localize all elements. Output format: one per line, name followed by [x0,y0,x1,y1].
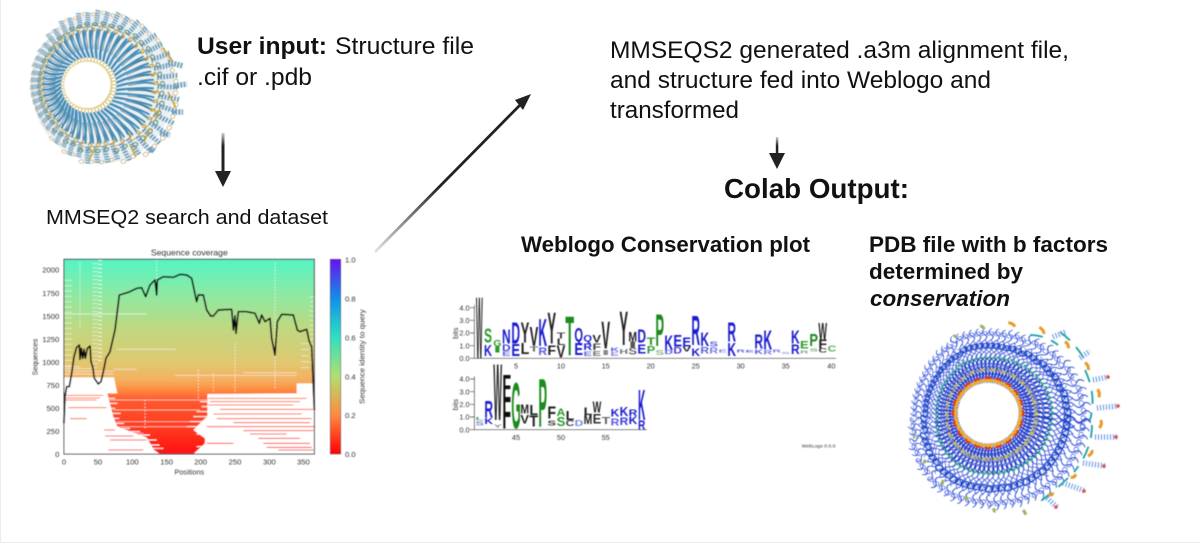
label: MMSEQ2 search and dataset: MMSEQ2 search and dataset [46,207,328,229]
colorbar labels: 0.6 [345,333,356,342]
y axis labels: 750 [47,381,59,390]
y axis labels: 250 [47,427,59,436]
colored stripes in sparse regions [64,395,315,450]
logo row 2: W [593,400,602,417]
logo row 2: S [475,420,485,427]
logo axis labels: 2.0 [459,400,470,409]
logo row 2: M [584,413,592,427]
y axis title: Sequences [30,338,39,375]
logo row 1: E [583,351,593,358]
logo row 2: W [493,348,502,438]
logo row 1: Y [619,302,628,356]
text: MMSEQS2 alignment description: transformed [610,97,739,124]
x axis title: Positions [174,467,205,476]
colorbar title: Sequence identity to query [358,309,367,404]
logo axis labels: 1.0 [459,341,470,350]
logo row 1: G [493,338,501,348]
logo row 2: L [584,406,592,418]
heading: user input: Structure file [335,33,474,60]
logo row 1: C [828,345,837,354]
logo row 1: L [521,341,529,358]
x axis labels: 50 [94,458,102,467]
logo row 1: R [763,350,772,357]
logo row 2: R [620,416,628,428]
coverage heatmap [63,259,315,454]
logo row 1: V [557,341,566,361]
logo row 1: D [637,326,646,347]
logo row 2: E [593,410,601,426]
colorbar labels: 1.0 [345,256,356,265]
logo row 1: K [727,339,736,360]
logo row 2: G [511,368,521,442]
heading: Weblogo Conservation plot: Weblogo Conservation plot [521,232,811,257]
logo row 1: K [484,343,492,360]
heading: user input: .cif or .pdb [197,64,312,91]
logo row 1: I [493,345,501,355]
logo row 1: K [763,324,772,355]
logo row 1: R [709,345,719,355]
logo row 1: R [791,341,800,357]
arrow: search to alignment [375,94,531,252]
logo row 1: I [628,340,637,349]
logo axis labels: 0.0 [459,425,470,434]
x axis labels: 250 [229,458,241,467]
y axis labels [42,266,59,459]
logo axis labels: bits [451,399,460,410]
logo axis labels: 50 [557,433,565,442]
logo axis labels: 1.0 [459,413,470,422]
chart title: Sequence coverage [151,247,228,257]
logo row 1: V [592,334,602,346]
logo axis labels: 25 [692,362,700,371]
logo row 1: S [809,347,818,352]
x axis labels: 300 [263,458,276,467]
logo row 2: L [566,408,574,423]
x axis labels [62,458,310,467]
logo row 1: E [682,335,691,350]
logo axis labels: 40 [827,362,835,371]
logo row 1: Y [521,318,529,350]
heading: PDB file with b factors [869,232,1108,311]
illustration: input protein ring structure [19,1,190,175]
colorbar labels: 0.4 [345,372,356,381]
logo row 1: S [781,351,791,355]
logo row 2: C [566,419,575,428]
logo row 1: W [476,278,483,377]
logo row 2: M [520,401,529,416]
frayed edges of the red zone [107,398,208,448]
logo row 1: E [800,339,809,351]
chart: weblogo conservation plot [451,278,837,449]
x axis labels: 200 [194,458,207,467]
logo row 2: R [611,417,619,428]
logo row 1: P [647,344,656,356]
logo row 1: R [691,307,700,354]
logo row 1: E [502,351,512,358]
logo axis labels: 2.0 [459,329,470,338]
chart: weblogo conservation plot: K [638,382,645,430]
logo row 2 [475,348,645,442]
logo row 1: R [583,342,592,352]
logo row 1: K [791,326,800,347]
logo row 1: H [619,347,628,356]
logo row 1: R [727,317,736,348]
logo row 1: S [484,325,492,348]
y axis labels: 1250 [42,335,59,344]
arrow: alignment to colab output [769,137,785,169]
x axis labels: 0 [62,458,66,467]
logo axes [470,305,836,430]
logo row 1: V [682,345,691,354]
logo row 1: K [691,347,701,359]
logo row 1: F [818,337,827,351]
logo row 1: E [637,342,646,357]
logo row 1: K [664,330,673,355]
logo row 2: K [620,405,629,419]
logo row 1: R [800,349,810,354]
logo row 2: D [575,418,583,428]
logo row 1: V [530,321,539,352]
heading: PDB file with b factors: determined by [869,259,1024,284]
logo axis labels: 4.0 [459,303,470,312]
logo row 2: R [629,408,638,418]
y axis labels: 1000 [42,358,59,367]
logo row 2: K [611,408,620,420]
logo row 2: L [475,416,484,421]
logo row 2: F [547,402,556,422]
logo row 1: E [745,349,755,354]
y axis labels: 1750 [42,289,59,298]
x axis labels: 100 [126,458,139,467]
logo axis labels: 10 [557,362,565,371]
logo axis labels: 4.0 [459,375,470,384]
logo row 2: F [502,387,511,438]
logo row 1: Q [574,326,583,347]
heading: Colab Output: Colab Output: [724,173,909,204]
text: MMSEQS2 alignment description: and structure fed into Weblogo and [610,67,991,94]
logo row 2: S [547,418,556,427]
logo row 1: S [655,348,664,357]
logo row 1: E [511,340,520,360]
logo axis labels [451,303,836,449]
logo row 1: E [673,332,682,351]
logo row 2: V [520,412,529,426]
logo row 1: D [502,343,511,353]
logo row 1: K [538,312,547,355]
logo axis labels: 15 [602,362,610,371]
logo row 1: Q [583,334,592,344]
y axis labels: 2000 [42,266,59,275]
logo row 1: C [818,349,828,355]
logo row 1: P [809,330,818,350]
logo row 2: P [538,366,547,442]
logo row 2: R [638,418,645,432]
logo row 1: R [754,331,763,353]
logo row 1: L [557,337,566,347]
logo axis labels: 55 [602,433,610,442]
colorbar [330,259,341,454]
logo row 1: E [592,349,601,358]
logo row 1: D [664,350,673,356]
logo axis labels: 3.0 [459,316,470,325]
logo axis labels: bits [451,327,460,339]
logo row 1: K [610,348,619,354]
logo row 1: R [538,346,547,358]
logo row 1: T [647,336,655,348]
arrow: input to search [215,133,231,187]
logo row 2: R [484,396,493,423]
logo row 1: N [502,326,511,349]
logo row 1: S [628,347,637,358]
logo row 1: K [754,349,763,356]
logo row 1: M [628,328,637,344]
logo row 1 [476,278,837,377]
logo row 1: I [601,348,610,357]
logo row 1: T [565,305,574,367]
logo row 2: A [557,407,565,419]
logo row 1: E [610,352,620,358]
text: MMSEQS2 alignment description [610,37,1069,124]
logo row 1: T [557,331,566,340]
logo row 2: K [484,417,493,426]
logo row 2: T [529,414,539,431]
logo axis labels: 5 [514,362,518,371]
coverage curve [64,274,314,423]
heading: PDB file with b factors: PDB file with b factors [869,232,1108,257]
logo row 1: R [736,349,747,354]
logo axis labels: 3.0 [459,387,470,396]
logo axis labels: 45 [512,433,520,442]
text: MMSEQS2 alignment description: MMSEQS2 generated .a3m alignment file, [610,37,1069,64]
heading: user input [197,33,474,91]
axes frame [64,259,314,454]
heading: PDB file with b factors: conservation [870,286,1010,311]
logo row 2: S [557,414,565,429]
colorbar labels: 0.2 [345,411,356,420]
white gaps in the heatmap [63,260,312,433]
logo row 2: T [602,416,610,427]
logo row 1: Y [547,304,556,353]
logo row 1: W [818,318,827,345]
y axis labels: 1500 [42,312,59,321]
illustration: protein ring coloured by conservation [892,314,1120,527]
logo axis labels: 20 [647,362,655,371]
logo row 1: E [574,339,583,359]
logo row 2: K [629,415,638,427]
logo row 1: D [673,345,682,355]
logo row 2: F [502,368,511,404]
logo row 1: R [772,349,783,354]
logo axis labels: 0.0 [459,354,470,363]
colorbar labels: 0.8 [345,294,356,303]
logo row 2: L [529,403,538,419]
y axis labels: 500 [47,404,59,413]
logo axis labels: WebLogo 0.0.0 [802,443,836,449]
logo row 1: D [511,316,520,350]
logo row 1: E [718,349,727,354]
logo row 1: V [601,314,610,357]
colorbar labels: 0.0 [345,450,356,459]
logo row 1: F [547,342,556,358]
logo row 2: Y [493,423,504,428]
logo row 1: S [709,340,718,349]
heading: user input: User input: [197,33,327,60]
logo axis labels: 30 [737,362,745,371]
logo row 1: R [700,345,709,355]
logo row 1: F [592,342,601,352]
logo row 1: P [655,305,664,356]
x axis labels: 350 [297,458,310,467]
logo axis labels: 35 [782,362,790,371]
x axis labels: 150 [160,458,173,467]
logo row 1: T [530,345,539,354]
logo row 1: K [700,330,709,351]
colorbar labels [345,256,356,459]
chart: sequence coverage [30,247,367,476]
y axis labels: 0 [55,450,59,459]
